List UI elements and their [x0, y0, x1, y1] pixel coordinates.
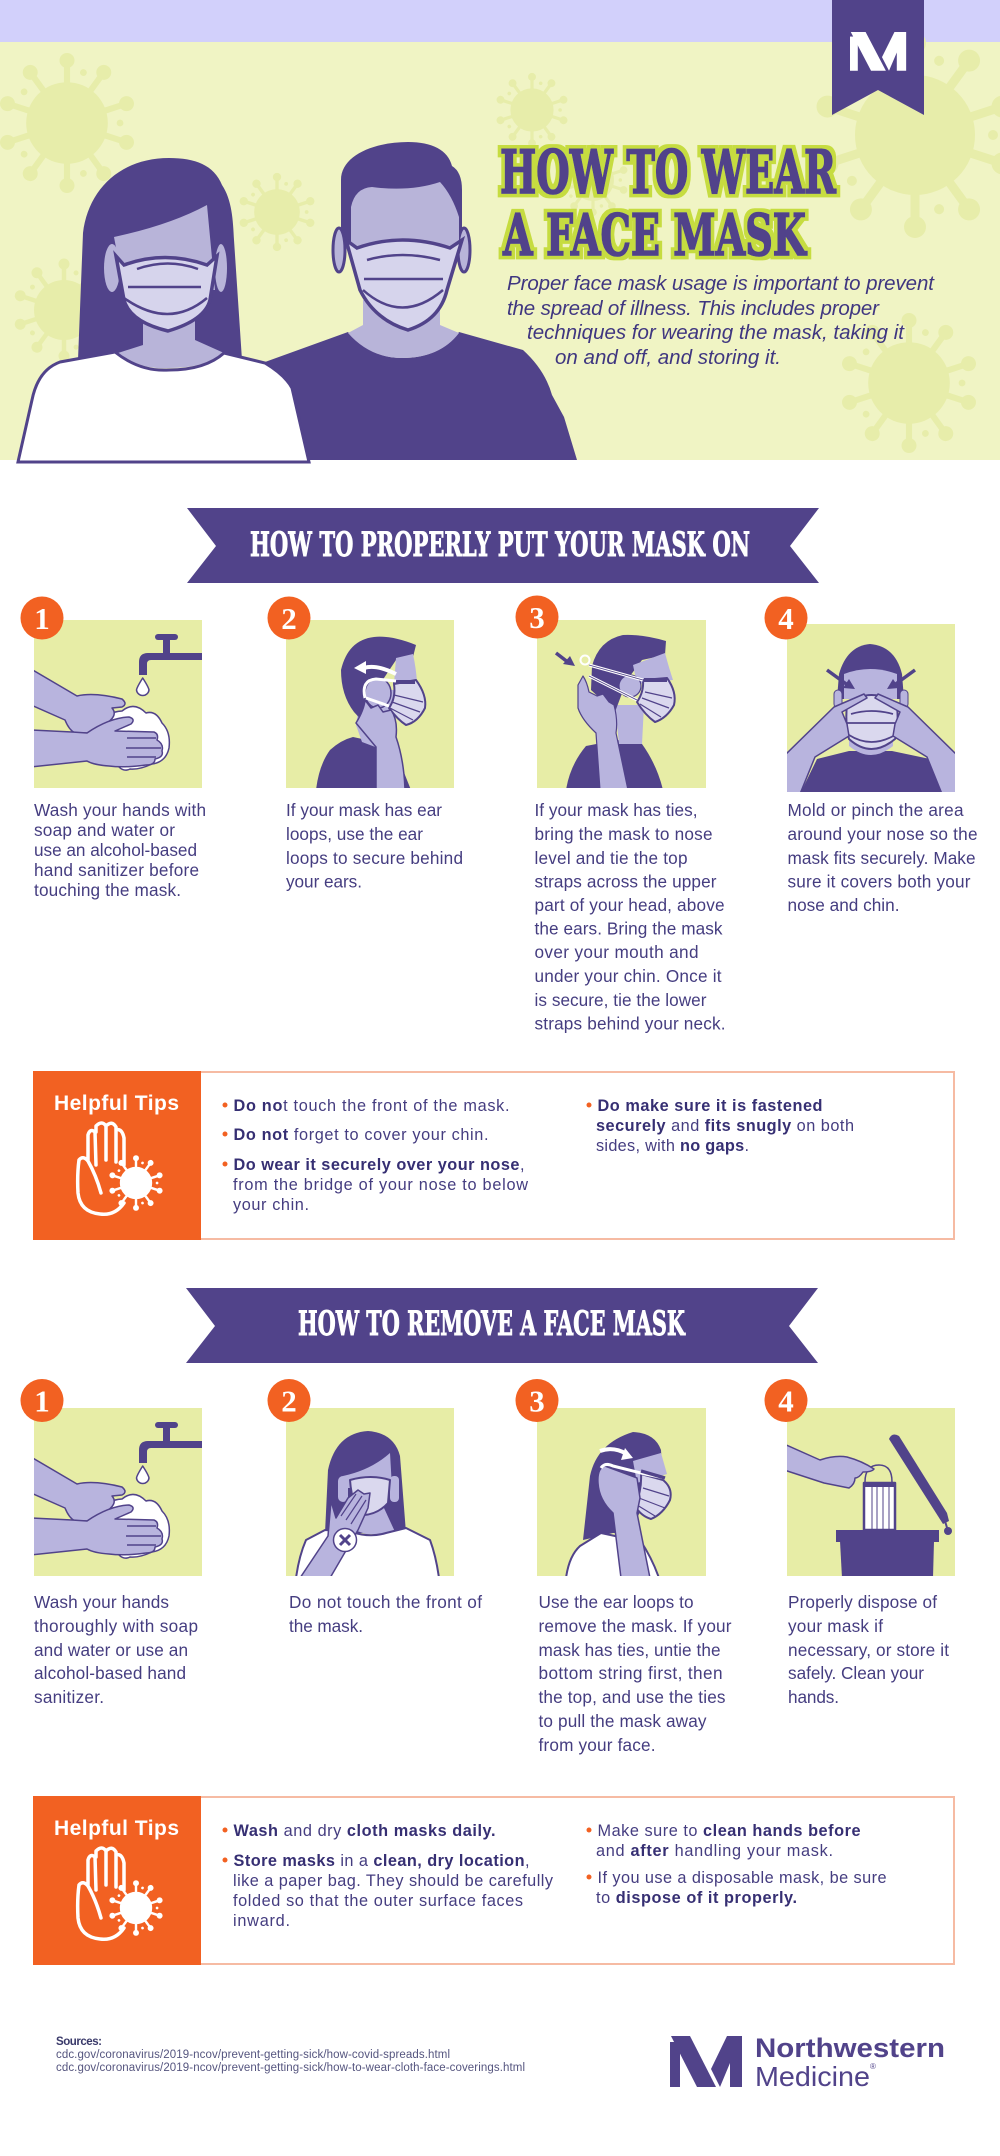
- step 2: ear loops: your ears.: [286, 872, 362, 892]
- step 1: wash hands: hand sanitizer before: [34, 860, 199, 880]
- title: A FACE MASK: [502, 202, 808, 269]
- illustration: man with mask: [265, 142, 577, 460]
- helpful tips panel 1: [33, 1071, 954, 1240]
- step 3: mask ties: over your mouth and: [534, 942, 698, 962]
- removal step 2: do not touch: Do not touch the front of: [289, 1592, 482, 1612]
- step 3: mask ties: [516, 596, 726, 1034]
- step 2: ear loops: If your mask has ear: [286, 800, 442, 820]
- removal step 2: do not touch: [268, 1379, 482, 1636]
- helpful tips panel 2: to dispose of it properly.: [596, 1889, 797, 1907]
- step 1: wash hands: use an alcohol-based: [34, 840, 197, 860]
- northwestern medicine logo: ®: [870, 2062, 876, 2071]
- helpful tips panel 1: Do not forget to cover your chin.: [234, 1126, 488, 1144]
- sources: cdc.gov/coronavirus/2019-ncov/prevent-getting-sick/how-covid-spreads.html: [56, 2049, 450, 2061]
- step 1: wash hands: [20, 596, 206, 900]
- step 2: ear loops: 2: [281, 601, 297, 636]
- removal step 1: wash hands: and water or use an: [34, 1640, 188, 1660]
- step 3: mask ties: part of your head, above: [534, 895, 724, 915]
- intro text: [507, 272, 935, 369]
- helpful tips panel 2: and after handling your mask.: [596, 1842, 833, 1860]
- step 3: mask ties: straps across the upper: [534, 872, 717, 892]
- step 3: mask ties: If your mask has ties,: [534, 800, 698, 820]
- intro text: on and off, and storing it.: [555, 346, 781, 369]
- removal step 4: dispose: necessary, or store it: [788, 1640, 949, 1660]
- step 1: wash hands: Wash your hands with: [34, 800, 206, 820]
- sources: Sources:: [56, 2036, 102, 2048]
- removal step 4: dispose: safely. Clean your: [788, 1663, 924, 1683]
- intro text: techniques for wearing the mask, taking it: [527, 321, 905, 344]
- removal step 3: use ear loops: remove the mask. If your: [538, 1616, 732, 1636]
- helpful tips panel 2: Store masks in a clean, dry location,: [234, 1852, 530, 1870]
- removal step 3: use ear loops: mask has ties, untie the: [538, 1640, 720, 1660]
- illustration: woman with mask: [18, 158, 309, 462]
- removal step 1: wash hands: sanitizer.: [34, 1687, 104, 1707]
- step 2: ear loops: loops, use the ear: [286, 824, 423, 844]
- hero panel: [0, 32, 1000, 460]
- section banner: put on: [187, 508, 819, 583]
- step 4: pinch nose: mask fits securely. Make: [788, 848, 976, 868]
- helpful tips panel 2: inward.: [233, 1912, 290, 1930]
- step 3: mask ties: the ears. Bring the mask: [534, 918, 723, 938]
- step 4: pinch nose: nose and chin.: [788, 895, 900, 915]
- helpful tips panel 1: your chin.: [233, 1196, 309, 1214]
- removal step 3: use ear loops: bottom string first, then: [538, 1663, 722, 1683]
- helpful tips panel 1: sides, with no gaps.: [596, 1137, 749, 1155]
- removal step 3: use ear loops: to pull the mask away: [538, 1711, 707, 1731]
- removal step 4: dispose: [764, 1379, 955, 1707]
- step 1: wash hands: 1: [34, 601, 50, 636]
- removal step 4: dispose: 4: [778, 1384, 794, 1418]
- step 1: wash hands: soap and water or: [34, 820, 175, 840]
- step 4: pinch nose: sure it covers both your: [788, 872, 971, 892]
- helpful tips panel 1: Do make sure it is fastened: [598, 1097, 822, 1115]
- step 4: pinch nose: 4: [778, 601, 794, 636]
- removal step 1: wash hands: 1: [34, 1384, 50, 1418]
- removal step 3: use ear loops: the top, and use the ties: [538, 1687, 726, 1707]
- helpful tips panel 2: Make sure to clean hands before: [598, 1822, 860, 1840]
- removal step 4: dispose: your mask if: [788, 1616, 883, 1636]
- section banner: remove: HOW TO REMOVE A FACE MASK: [298, 1304, 686, 1344]
- removal step 2: do not touch: 2: [281, 1384, 297, 1418]
- helpful tips panel 2: If you use a disposable mask, be sure: [598, 1869, 886, 1887]
- step 3: mask ties: is secure, tie the lower: [534, 990, 707, 1010]
- step 3: mask ties: under your chin. Once it: [534, 966, 722, 986]
- step 2: ear loops: [268, 596, 463, 892]
- step 2: ear loops: loops to secure behind: [286, 848, 463, 868]
- helpful tips panel 1: Do wear it securely over your nose,: [234, 1156, 524, 1174]
- step 4: pinch nose: Mold or pinch the area: [788, 800, 964, 820]
- helpful tips panel 2: [33, 1796, 954, 1965]
- helpful tips panel 2: Wash and dry cloth masks daily.: [234, 1822, 496, 1840]
- helpful tips panel 1: securely and fits snugly on both: [596, 1117, 854, 1135]
- step 3: mask ties: level and tie the top: [534, 848, 688, 868]
- sources: cdc.gov/coronavirus/2019-ncov/prevent-getting-sick/how-to-wear-cloth-face-coverings.html: [56, 2062, 525, 2074]
- helpful tips panel 1: Helpful Tips: [54, 1092, 179, 1115]
- helpful tips panel 1: Do not touch the front of the mask.: [234, 1097, 510, 1115]
- removal step 3: use ear loops: 3: [529, 1384, 545, 1418]
- step 1: wash hands: touching the mask.: [34, 880, 181, 900]
- title: [500, 138, 837, 269]
- helpful tips panel 2: folded so that the outer surface faces: [233, 1892, 523, 1910]
- removal step 1: wash hands: thoroughly with soap: [34, 1616, 198, 1636]
- helpful tips panel 2: Helpful Tips: [54, 1817, 179, 1840]
- removal step 4: dispose: hands.: [788, 1687, 839, 1707]
- header band: [0, 0, 1000, 42]
- logo flag: [832, 0, 924, 115]
- step 4: pinch nose: around your nose so the: [788, 824, 978, 844]
- intro text: the spread of illness. This includes proper: [507, 297, 880, 320]
- helpful tips panel 2: like a paper bag. They should be carefully: [233, 1872, 554, 1890]
- northwestern medicine logo: Northwestern: [755, 2033, 945, 2063]
- helpful tips panel 1: from the bridge of your nose to below: [233, 1176, 528, 1194]
- step 3: mask ties: bring the mask to nose: [534, 824, 712, 844]
- step 4: pinch nose: [764, 596, 978, 915]
- sources: [56, 2036, 525, 2074]
- section banner: remove: [186, 1288, 818, 1363]
- northwestern medicine logo: Medicine: [755, 2061, 870, 2092]
- northwestern medicine logo: [670, 2033, 945, 2092]
- removal step 3: use ear loops: Use the ear loops to: [538, 1592, 694, 1612]
- removal step 1: wash hands: alcohol-based hand: [34, 1663, 186, 1683]
- intro text: Proper face mask usage is important to prevent: [507, 272, 935, 295]
- step 3: mask ties: 3: [529, 600, 545, 635]
- removal step 3: use ear loops: from your face.: [538, 1735, 656, 1755]
- removal step 3: use ear loops: [516, 1379, 732, 1755]
- removal step 1: wash hands: Wash your hands: [34, 1592, 169, 1612]
- step 3: mask ties: straps behind your neck.: [534, 1014, 726, 1034]
- removal step 4: dispose: Properly dispose of: [788, 1592, 937, 1612]
- removal step 2: do not touch: the mask.: [289, 1616, 363, 1636]
- removal step 1: wash hands: [20, 1379, 202, 1707]
